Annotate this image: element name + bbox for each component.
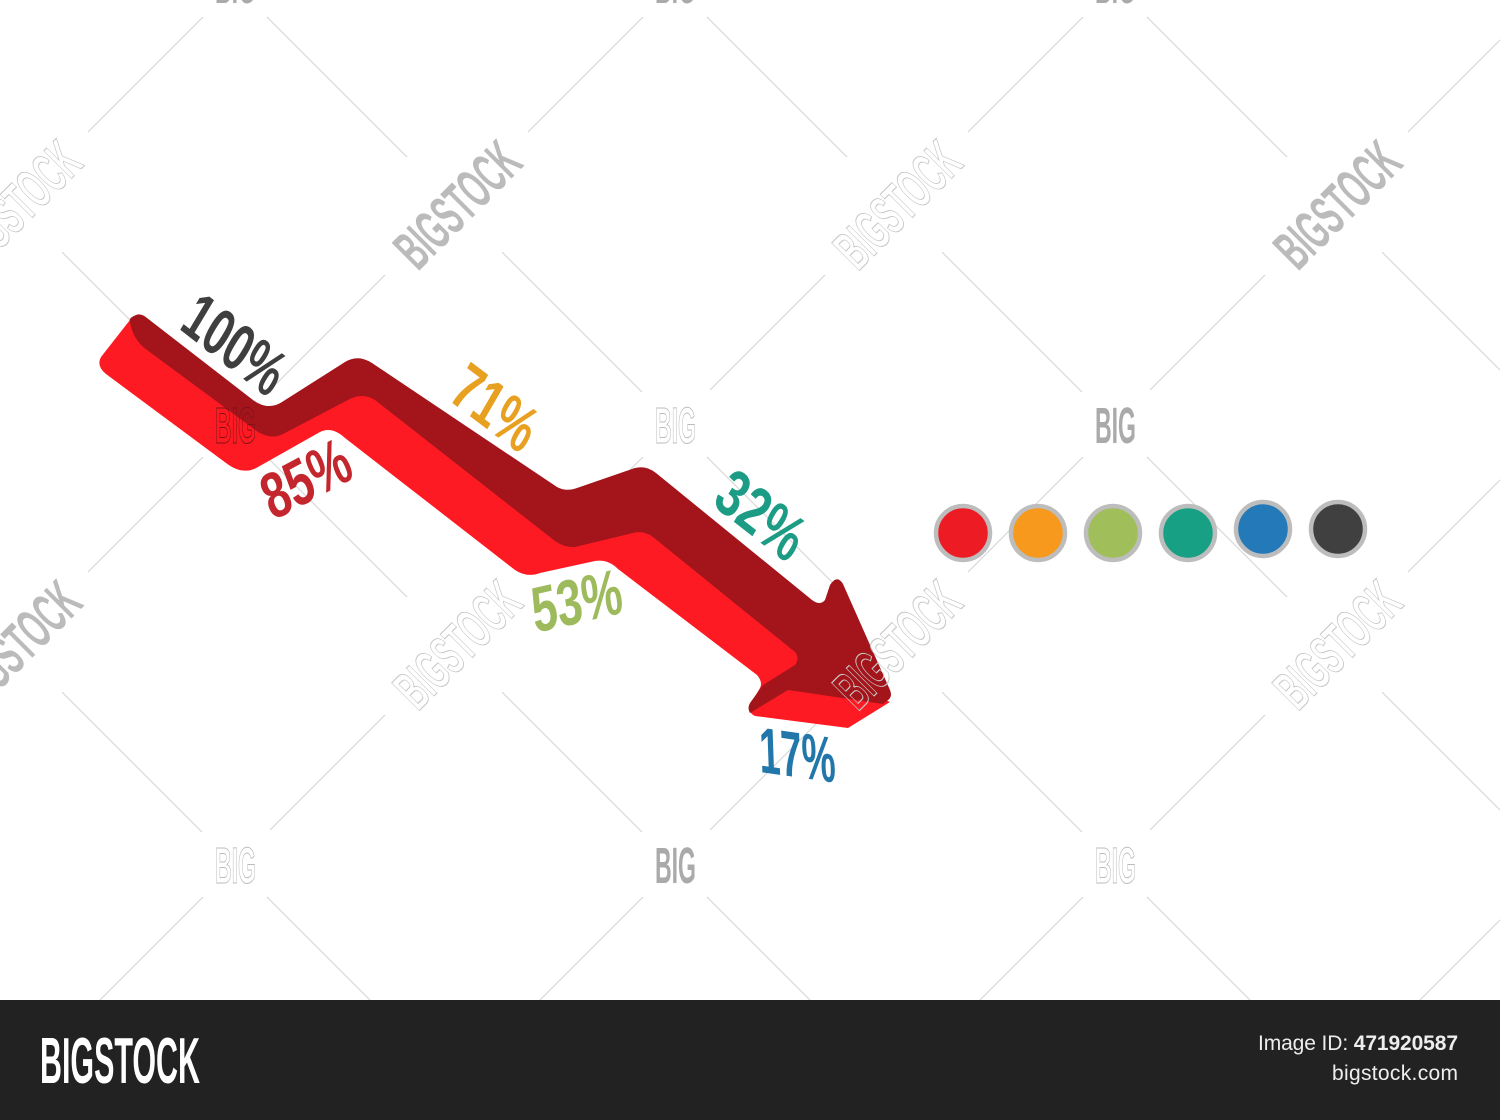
text: BIG	[1095, 397, 1136, 454]
text: BIG	[215, 397, 256, 454]
arrow: bright red lower face	[99, 320, 890, 728]
label: 17%: 17%	[758, 714, 837, 797]
legend dots	[936, 502, 1365, 560]
label: 53%: 53%	[527, 555, 627, 647]
footer bar: BIGSTOCK	[40, 1024, 200, 1097]
watermark: rotated BIGSTOCK marks	[0, 129, 1414, 721]
dot: blue	[1236, 502, 1290, 556]
watermark: rotated BIGSTOCK marks: BIGSTOCK	[382, 569, 534, 721]
declining 3D arrow	[99, 314, 891, 728]
label: 32%: 32%	[704, 454, 818, 576]
watermark: BIG marks	[215, 0, 1136, 894]
arrow: dark red upper face	[130, 314, 891, 713]
label: 100%: 100%	[171, 278, 299, 411]
watermark: BIG marks: BIG	[655, 837, 696, 894]
dot: green	[1086, 506, 1140, 560]
dot: red	[936, 506, 990, 560]
image id: Image ID: 471920587	[1258, 1032, 1458, 1055]
watermark: BIG marks: BIG	[215, 837, 256, 894]
dot: orange	[1011, 506, 1065, 560]
watermark: rotated BIGSTOCK marks: BIGSTOCK	[822, 129, 974, 281]
watermark: rotated BIGSTOCK marks: BIGSTOCK	[382, 129, 534, 281]
site name: bigstock.com	[1332, 1062, 1458, 1085]
dot: dark grey	[1311, 502, 1365, 556]
label: 71%: 71%	[440, 349, 550, 467]
footer bar	[0, 1000, 1500, 1120]
watermark: BIG marks: BIG	[655, 397, 696, 454]
text: BIG	[1095, 837, 1136, 894]
label: 85%: 85%	[250, 423, 361, 534]
watermark over arrow: BIGSTOCK: BIGSTOCK	[822, 569, 974, 721]
dot: teal	[1161, 506, 1215, 560]
